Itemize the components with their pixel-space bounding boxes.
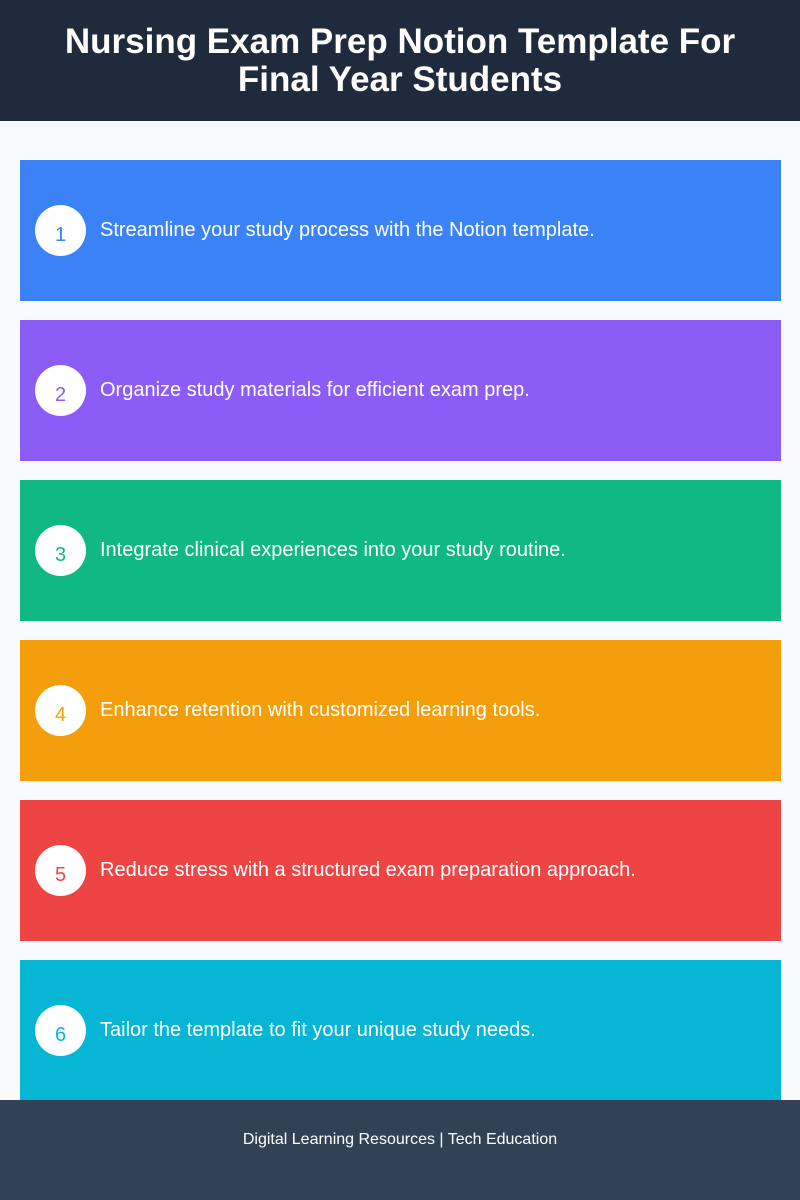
panel: step 2: 2 [55,384,66,406]
panel: step 2 [20,320,781,461]
panel: step 1: Streamline your study process with the Notion template. [100,219,595,241]
panel: step 1 [20,160,781,301]
panel: step 1: 1 [55,224,66,246]
panel: step 3: Integrate clinical experiences into your study routine. [100,539,566,561]
panel: step 5: 5 [55,864,66,886]
footer [0,1100,800,1200]
panel: step 3 [20,480,781,621]
panel: step 4 [20,640,781,781]
panel: step 6: Tailor the template to fit your unique study needs. [100,1019,536,1041]
panel: step 6: 6 [55,1024,66,1046]
title [0,0,800,121]
panel: step 5 [20,800,781,941]
panel: step 2: Organize study materials for efficient exam prep. [100,379,530,401]
panel: step 5: Reduce stress with a structured exam preparation approach. [100,859,636,881]
panel: step 6 [20,960,781,1101]
panel: step 4: 4 [55,704,66,726]
title: Final Year Students [238,60,562,99]
footer: Digital Learning Resources | Tech Education [243,1131,557,1148]
panel: step 4: Enhance retention with customized learning tools. [100,699,540,721]
title: Nursing Exam Prep Notion Template For [65,22,735,61]
panel: step 3: 3 [55,544,66,566]
